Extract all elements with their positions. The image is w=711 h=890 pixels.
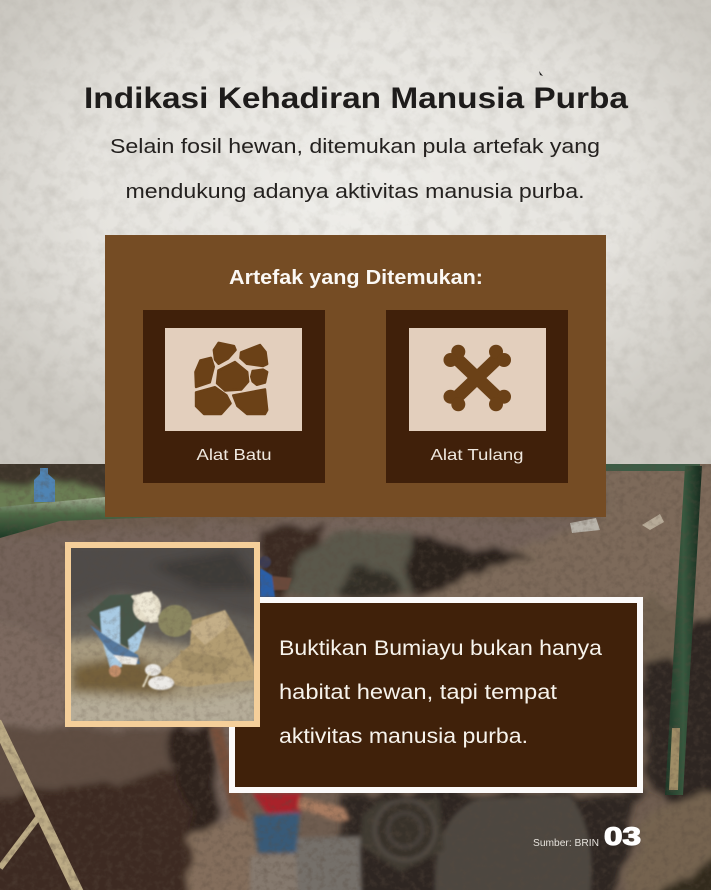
card: Alat Tulang [386,310,568,483]
callout box [232,600,640,790]
callout text: habitat hewan, tapi tempat [279,681,557,704]
scene detail: stone statue and steps [209,727,592,890]
title: Indikasi Kehadiran Manusia Purba [84,82,628,115]
icon: crossed bones [444,345,511,411]
source note: Sumber: BRIN [533,838,599,849]
scene detail: ladder [0,722,82,890]
background: paper texture [0,0,711,466]
label: Alat Batu: Alat Batu [196,447,272,464]
label: Alat Tulang: Alat Tulang [430,447,524,464]
callout text: Buktikan Bumiayu bukan hanya [279,637,602,660]
callout text: aktivitas manusia purba. [279,725,528,748]
page number: 03 [604,823,641,851]
man: vest and shirt [87,594,146,648]
scene detail: bamboo pipe [0,497,165,538]
scene detail: bamboo pole [606,464,702,795]
scene detail: shoes [570,518,600,533]
intro text: mendukung adanya aktivitas manusia purba. [126,181,584,203]
icon: stones [195,343,267,414]
intro text [110,136,600,203]
woman: jacket and hat [160,610,254,687]
inset photo: two archaeologists [60,540,260,730]
intro text: Selain fosil hewan, ditemukan pula artefak yang [110,136,600,158]
card: Alat Batu [143,310,325,483]
scene detail: water jug [34,468,55,502]
scene detail: person in the pit [259,556,292,597]
callout text [279,637,602,748]
background: excavation photo [0,450,711,890]
panel heading: Artefak yang Ditemukan: [229,267,483,289]
panel: artefacts [105,235,606,517]
